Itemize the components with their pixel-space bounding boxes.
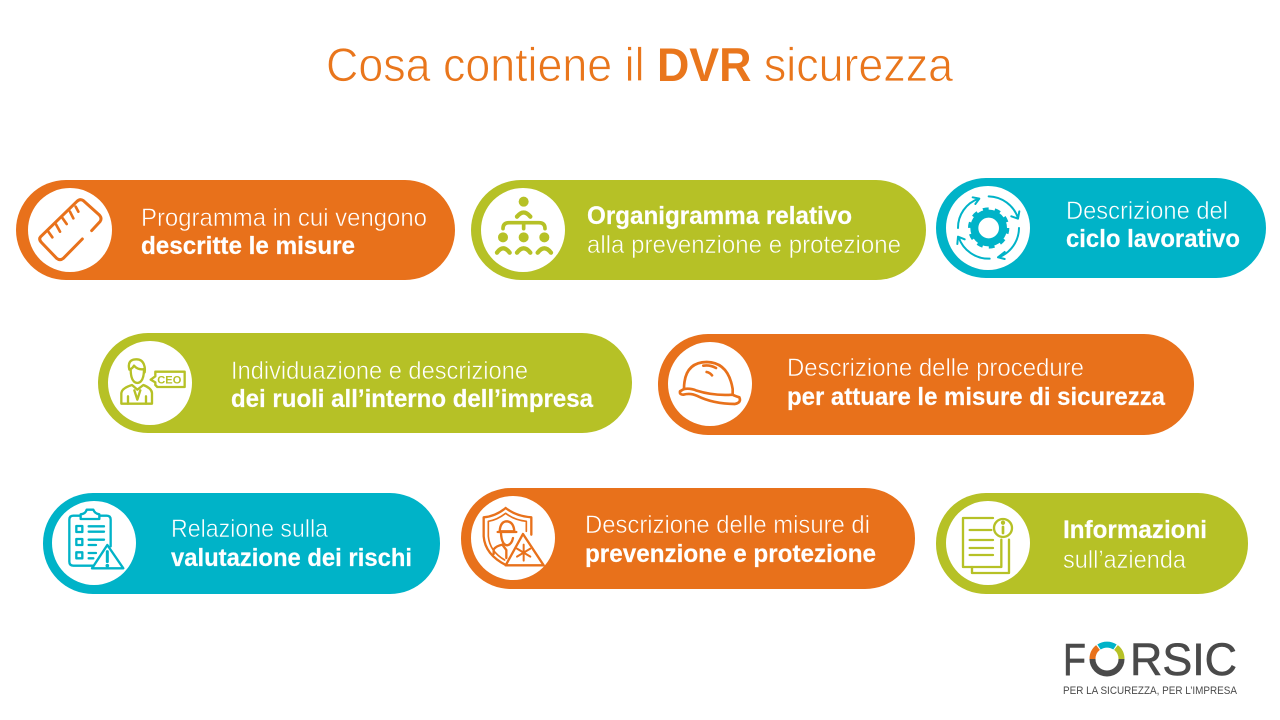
icon: clipboard with warning [69,510,123,568]
panel: ruoli [98,333,632,433]
icon: documents with info [963,518,1012,573]
text: valutazione: valutazione dei rischi [171,544,412,572]
text: descrizione del: Descrizione del [1066,197,1228,225]
title: Cosa contiene il DVR sicurezza [326,38,954,91]
panel: ciclo lavorativo [936,178,1266,278]
text: descrizione procedure: Descrizione delle procedure [787,354,1084,382]
panel: organigramma [471,180,926,280]
icon: ruler [40,200,101,260]
text: ciclo lavorativo: ciclo lavorativo [1066,225,1240,253]
logo: FORSIC [1063,634,1238,697]
icon: gear cycle [957,196,1019,259]
icon: shield with worker and snow warning [484,508,544,565]
logo letters RSIC: RSIC [1130,634,1237,685]
text: descritte: descritte le misure [141,232,355,260]
icon: org chart [497,197,551,253]
logo tagline: PER LA SICUREZZA, PER L’IMPRESA [1063,685,1238,697]
text: programma: Programma in cui vengono [141,204,427,232]
text: relazione: Relazione sulla [171,515,328,543]
text: dei ruoli: dei ruoli all’interno dell’impresa [231,385,594,413]
logo letter F: F [1063,634,1086,685]
icon: hard hat [680,362,740,404]
text: per attuare: per attuare le misure di sicurezza [787,383,1166,411]
panel: procedure [658,334,1194,435]
text: prevenzione: alla prevenzione e protezione [587,231,901,259]
text: individuazione: Individuazione e descrizione [231,357,528,385]
icon: CEO person [121,359,185,404]
text: descrizione misure: Descrizione delle misure di [585,511,870,539]
icon: CEO person: CEO [157,375,182,387]
panel: programma [16,180,455,280]
panel: informazioni azienda [936,493,1248,594]
panel: misure prevenzione [461,488,915,589]
panel: valutazione rischi [43,493,440,594]
text: organigramma: Organigramma relativo [587,202,852,230]
text: azienda: sull’azienda [1063,546,1186,574]
text: informazioni: Informazioni [1063,516,1207,544]
text: prevenzione e protezione: prevenzione e protezione [585,540,876,568]
logo ring O [1092,645,1122,674]
